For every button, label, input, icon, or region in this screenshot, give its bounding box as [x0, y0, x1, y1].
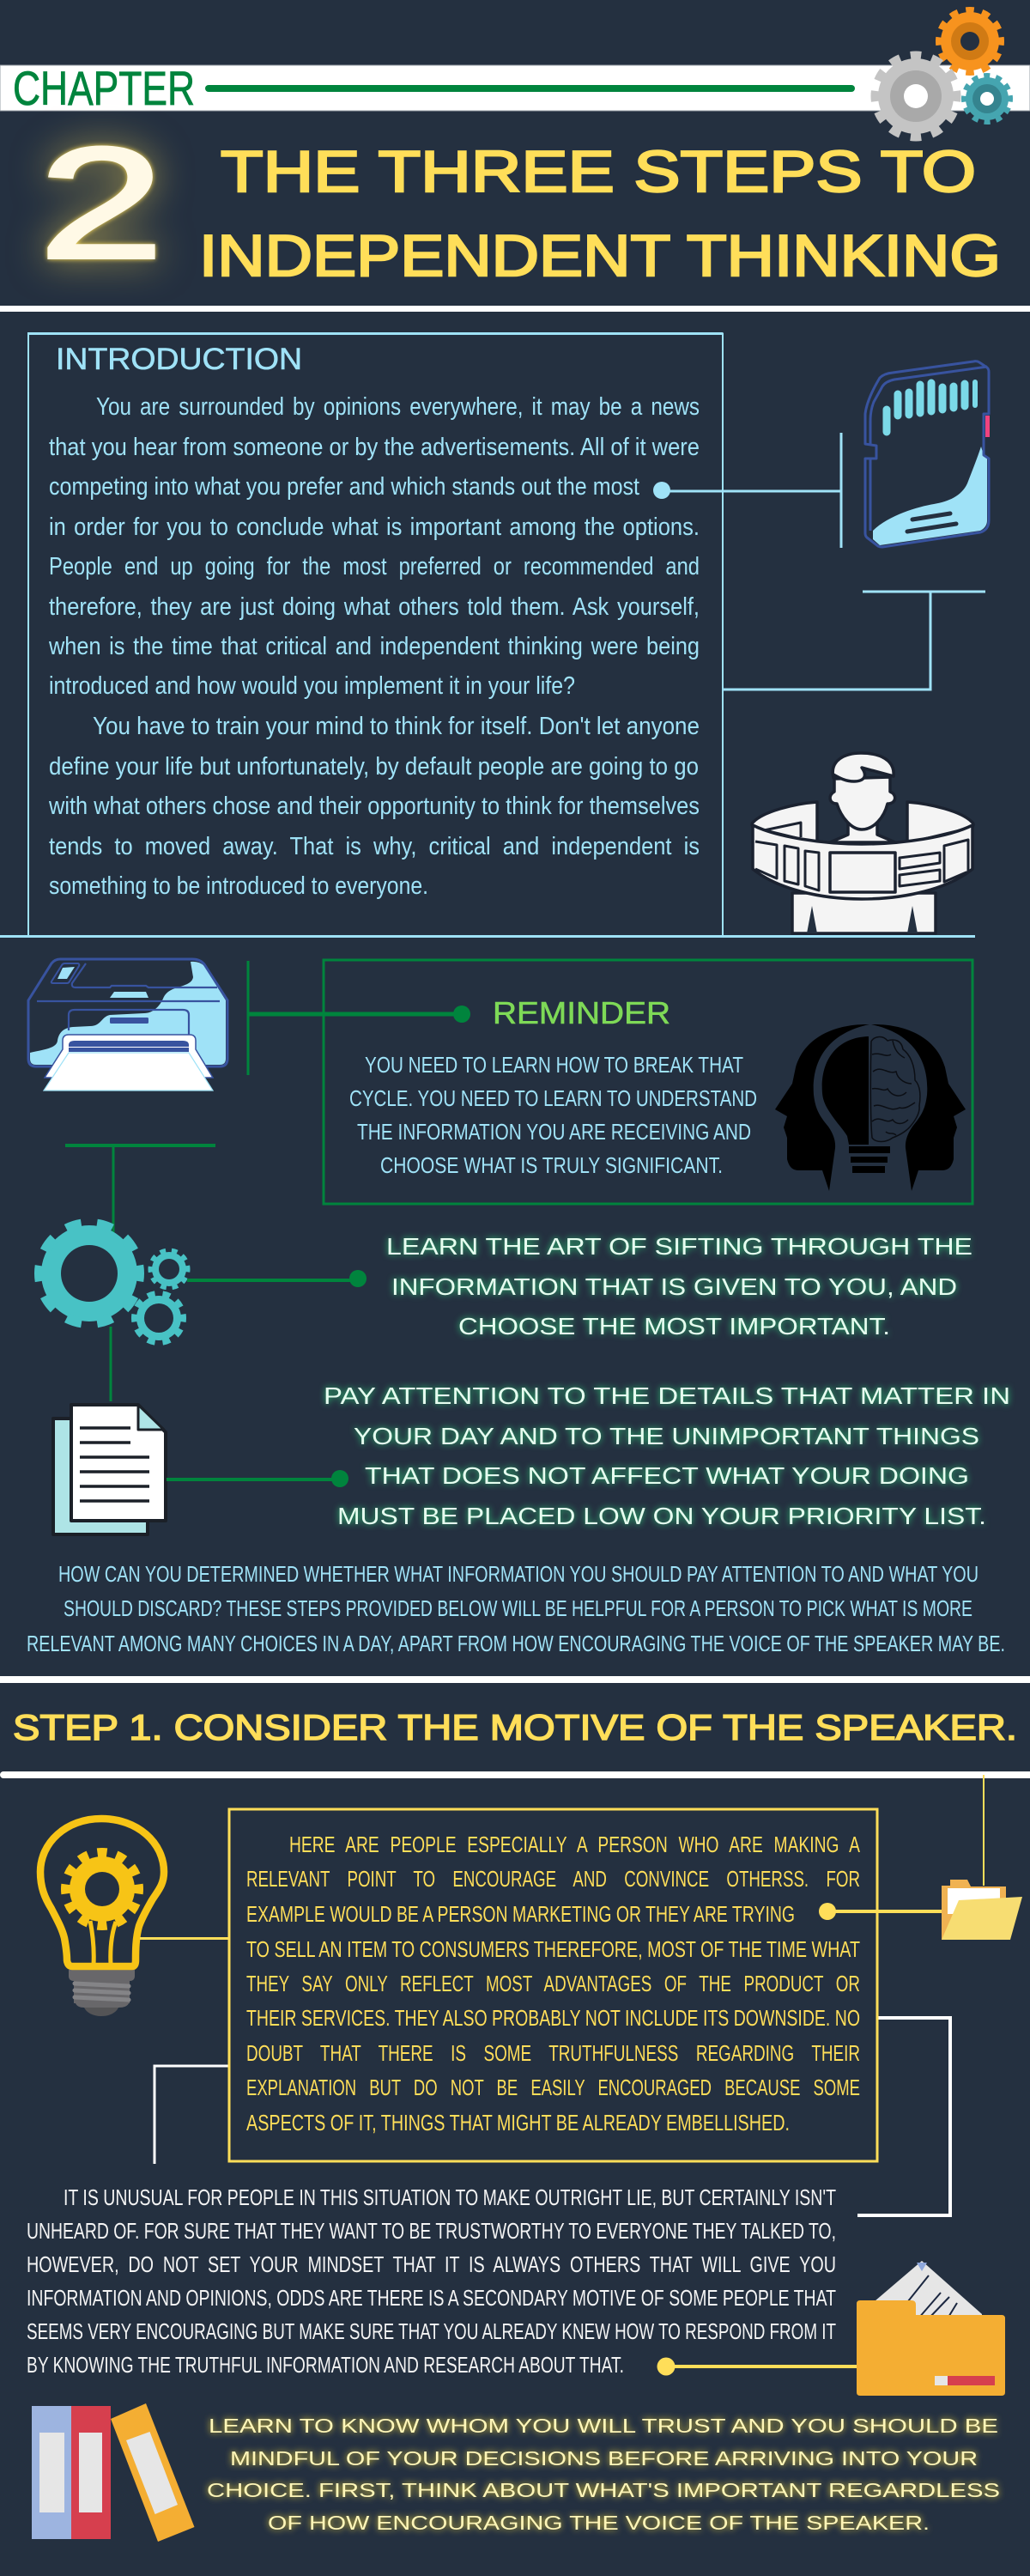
text block: introduction body: that you hear from someone or by the advertisements. All of it were	[49, 434, 700, 461]
callout: sifting information	[386, 1233, 972, 1340]
connector: reminder to gears	[65, 1145, 215, 1401]
icon: two heads with brain bulb	[775, 1024, 966, 1191]
icon: documents	[53, 1405, 166, 1534]
icon: three gears	[876, 10, 1010, 137]
connector: intro to memory card	[653, 433, 841, 548]
text block: introduction body: in order for you to conclude what is important among the options.	[49, 513, 700, 541]
text block: unusual to lie	[27, 2184, 836, 2378]
chapter label: CHAPTER	[13, 61, 195, 115]
text block: reminder body: CHOOSE WHAT IS TRULY SIGNIFICANT.	[380, 1152, 723, 1178]
callout: sifting information: INFORMATION THAT IS GIVEN TO YOU, AND	[391, 1273, 957, 1300]
panel: step 1 explanation	[229, 1809, 877, 2161]
panel: reminder	[324, 960, 972, 1204]
text block: reminder body: CYCLE. YOU NEED TO LEARN TO UNDERSTAND	[349, 1085, 757, 1111]
text block: reminder body: THE INFORMATION YOU ARE RECEIVING AND	[357, 1119, 751, 1145]
text block: introduction body: define your life but unfortunately, by default people are going to go	[49, 753, 699, 781]
text block: introduction body: competing into what you prefer and which stands out the most	[49, 473, 639, 501]
callout: details that matter: PAY ATTENTION TO THE DETAILS THAT MATTER IN	[324, 1382, 1010, 1409]
icon: teal gears	[39, 1224, 187, 1342]
text block: step 1 body: EXAMPLE WOULD BE A PERSON MARKETING OR THEY ARE TRYING	[246, 1901, 795, 1927]
text block: introduction body: introduced and how would you implement it in your life?	[49, 672, 575, 700]
panel: introduction	[0, 332, 975, 938]
connectors: white brackets	[154, 2018, 950, 2215]
text block: introduction body: with what others chose and their opportunity to think for themselves	[48, 793, 700, 820]
icon: printer	[28, 959, 227, 1091]
text block: introduction body: People end up going for the most preferred or recommended and	[49, 553, 700, 580]
callout: learn whom to trust	[207, 2415, 1000, 2534]
callout: sifting information: CHOOSE THE MOST IMPORTANT.	[458, 1313, 890, 1340]
title: THE THREE STEPS TO	[221, 139, 976, 204]
callout: details that matter: MUST BE PLACED LOW ON YOUR PRIORITY LIST.	[337, 1503, 986, 1529]
connector: gears to callout	[187, 1270, 367, 1287]
callout: learn whom to trust: MINDFUL OF YOUR DECISIONS BEFORE ARRIVING INTO YOUR	[230, 2447, 978, 2470]
callout: learn whom to trust: OF HOW ENCOURAGING THE VOICE OF THE SPEAKER.	[268, 2512, 930, 2534]
icon: orange folder with paper	[857, 2261, 1005, 2396]
text block: introduction body: when is the time that critical and independent thinking were being	[48, 633, 700, 660]
callout: learn whom to trust: CHOICE. FIRST, THINK ABOUT WHAT'S IMPORTANT REGARDLESS	[207, 2479, 1000, 2501]
connector: text to folder	[657, 2358, 857, 2375]
callout: details that matter: YOUR DAY AND TO THE UNIMPORTANT THINGS	[354, 1423, 979, 1449]
connector: bulb to box	[140, 1937, 230, 1940]
connector: printer to reminder	[248, 961, 470, 1075]
callout: details that matter	[324, 1382, 1010, 1529]
chapter number: 2	[39, 114, 164, 291]
icon: light bulb with gear	[40, 1819, 164, 2016]
text block: introduction body: tends to moved away. That is why, critical and independent is	[49, 833, 700, 860]
text block: introduction body: You are surrounded by opinions everywhere, it may be a news	[96, 393, 700, 421]
title: INDEPENDENT THINKING	[199, 223, 1001, 289]
heading: reminder: REMINDER	[493, 995, 670, 1030]
icon: books	[32, 2403, 194, 2542]
text block: reminder body: YOU NEED TO LEARN HOW TO BREAK THAT	[365, 1052, 743, 1078]
text block: unusual to lie: BY KNOWING THE TRUTHFUL INFORMATION AND RESEARCH ABOUT THAT.	[27, 2352, 624, 2378]
text block: introduction body: You have to train your mind to think for itself. Don't let anyone	[93, 713, 700, 740]
heading: step 1: STEP 1. CONSIDER THE MOTIVE OF THE SPEAKER.	[13, 1707, 1017, 1747]
connector: documents to callout	[167, 1470, 348, 1487]
callout: learn whom to trust: LEARN TO KNOW WHOM YOU WILL TRUST AND YOU SHOULD BE	[209, 2415, 998, 2437]
callout: details that matter: THAT DOES NOT AFFECT WHAT YOUR DOING	[365, 1462, 969, 1489]
text block: introduction body	[48, 393, 700, 900]
connector: intro to person	[723, 592, 985, 690]
text block: reminder body	[349, 1052, 757, 1178]
connector: box to small folder	[819, 1775, 985, 1920]
green banner rule	[205, 85, 855, 92]
chapter banner	[0, 61, 1030, 115]
text block: introduction body: something to be introduced to everyone.	[49, 872, 428, 900]
icon: memory card	[865, 361, 990, 547]
icon: person with curved screens	[752, 753, 973, 933]
icon: small folder	[942, 1880, 1022, 1940]
text block: step 1 body	[246, 1832, 860, 2136]
title	[199, 139, 1001, 289]
text block: step 1 body: ASPECTS OF IT, THINGS THAT MIGHT BE ALREADY EMBELLISHED.	[246, 2110, 790, 2136]
heading: introduction: INTRODUCTION	[56, 343, 302, 376]
text block: introduction body: therefore, they are just doing what others told them. Ask yourself,	[49, 593, 700, 621]
text block: how to determine	[27, 1561, 1005, 1656]
callout: sifting information: LEARN THE ART OF SIFTING THROUGH THE	[386, 1233, 972, 1260]
